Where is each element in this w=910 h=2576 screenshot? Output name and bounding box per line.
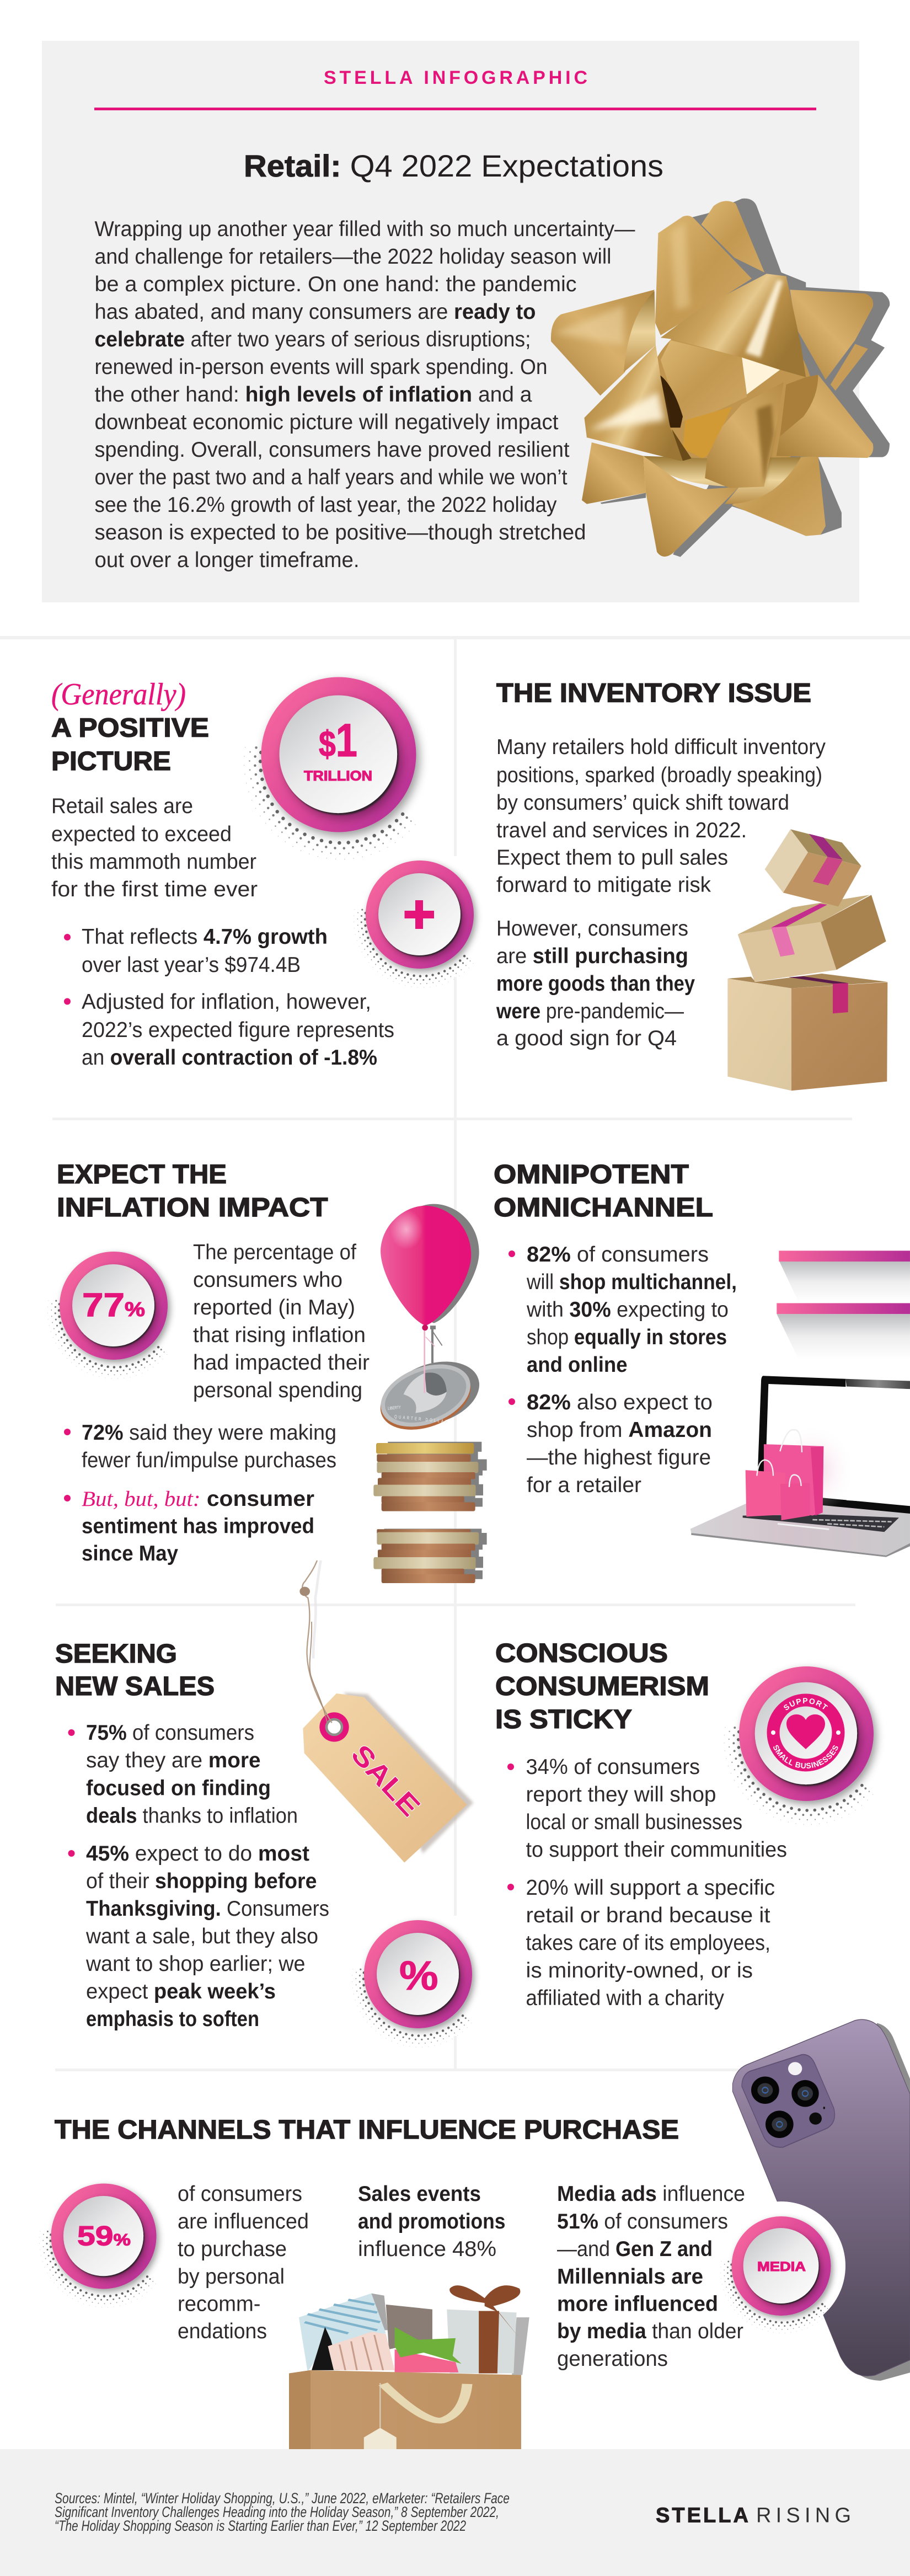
heading: THE CHANNELS THAT INFLUENCE PURCHASE: [55, 2115, 679, 2145]
heading: IS STICKY: [495, 1705, 632, 1734]
bullets: shop equally in stores: [527, 1326, 727, 1349]
bullets: fewer fun/impulse purchases: [82, 1449, 336, 1472]
intro paragraph: out over a longer timeframe.: [95, 548, 360, 572]
text block: Many retailers hold difficult inventory: [496, 735, 826, 759]
text block: However, consumers: [496, 917, 688, 940]
logo: Stella Rising: STELLA: [656, 2504, 748, 2527]
intro paragraph: has abated, and many consumers are ready to: [95, 300, 536, 324]
text block: Expect them to pull sales: [496, 846, 728, 869]
heading: [57, 1160, 328, 1222]
intro paragraph: spending. Overall, consumers have proved resilient: [95, 438, 570, 462]
column: media ads: more influenced: [557, 2292, 718, 2316]
heading: OMNICHANNEL: [494, 1193, 713, 1222]
bullets: [64, 925, 394, 1070]
heading: [495, 1639, 709, 1734]
sources: [55, 2490, 510, 2534]
bullets: 72% said they were making: [82, 1421, 336, 1445]
bullets: 34% of consumers: [526, 1755, 700, 1779]
badge: $1 trillion: TRILLION: [304, 768, 372, 784]
intro paragraph: season is expected to be positive—though stretched: [95, 521, 586, 544]
bullets: emphasis to soften: [86, 2007, 259, 2031]
text block: more goods than they: [496, 972, 695, 996]
column: media ads: 51% of consumers: [557, 2210, 728, 2233]
column: personal recommendations: by personal: [178, 2265, 285, 2289]
bullets: to support their communities: [526, 1838, 787, 1862]
image: sale price tag: SALE: [345, 1739, 426, 1822]
bullets: shop from Amazon: [527, 1418, 712, 1442]
logo: Stella Rising: RISING: [756, 2504, 851, 2527]
image: stacked boxes: [727, 829, 887, 1091]
logo: Stella Rising: [656, 2504, 851, 2527]
badge: support small businesses: SMALL BUSINESSES: [773, 1745, 838, 1768]
heading: OMNIPOTENT: [494, 1160, 689, 1189]
heading: A POSITIVE: [51, 714, 209, 742]
bullets: will shop multichannel,: [526, 1270, 737, 1294]
bullets: Thanksgiving. Consumers: [86, 1897, 329, 1921]
image: gold gift bow: [551, 199, 890, 557]
text block: Retail sales are: [51, 794, 193, 818]
bullets: Adjusted for inflation, however,: [82, 990, 371, 1014]
bullets: expect peak week’s: [86, 1980, 276, 2003]
intro paragraph: [95, 217, 635, 572]
text block: personal spending: [193, 1378, 362, 1402]
heading: (Generally): [51, 677, 186, 712]
column: personal recommendations: recomm-: [178, 2292, 260, 2316]
intro paragraph: downbeat economic picture will negatively impact: [95, 410, 559, 434]
image: laptop with shopping bags on shelves: [690, 1250, 910, 1557]
heading: [494, 1160, 713, 1222]
image: balloon lifting a coin: QUARTER DOLLAR: [394, 1414, 448, 1424]
text block: consumers who: [193, 1268, 342, 1292]
sources: Sources: Mintel, “Winter Holiday Shopping, U.S.,” June 2022, eMarketer: “Retailers Face: [55, 2490, 510, 2506]
text block: were pre-pandemic—: [496, 1000, 684, 1023]
column: sales events: Sales events: [358, 2182, 481, 2206]
panel: omnipotent omnichannel: [494, 1160, 910, 1557]
bullets: want to shop earlier; we: [85, 1952, 306, 1976]
panel: the inventory issue: [496, 678, 887, 1091]
heading: EXPECT THE: [57, 1160, 227, 1189]
bullets: deals thanks to inflation: [86, 1804, 298, 1828]
bullets: focused on finding: [86, 1776, 271, 1800]
bullets: sentiment has improved: [82, 1515, 314, 1538]
intro paragraph: Wrapping up another year filled with so much uncertainty—: [95, 217, 635, 241]
bullets: 82% of consumers: [527, 1243, 709, 1266]
image: sale price tag: [299, 1560, 473, 1863]
heading: SEEKING: [55, 1639, 177, 1669]
column: media ads: generations: [557, 2347, 668, 2371]
bullets: retail or brand because it: [526, 1904, 770, 1927]
text block: that rising inflation: [193, 1323, 366, 1347]
bullets: and online: [527, 1353, 628, 1377]
bullets: [68, 1721, 329, 2031]
panel: seeking new sales: [55, 1560, 473, 2047]
text block: positions, sparked (broadly speaking): [496, 763, 822, 787]
panel: expect the inflation impact: [47, 1160, 487, 1583]
bullets: 75% of consumers: [86, 1721, 254, 1745]
text block: [193, 1241, 370, 1402]
panel: the channels that influence purchase: [39, 2115, 845, 2449]
badge: 59%: [39, 2183, 157, 2307]
bullets: That reflects 4.7% growth: [82, 925, 328, 949]
column: personal recommendations: are influenced: [178, 2210, 309, 2233]
heading: THE INVENTORY ISSUE: [496, 678, 811, 708]
image: coin stacks: [373, 1442, 487, 1583]
column: personal recommendations: of consumers: [178, 2182, 302, 2206]
column: media ads: Media ads influence: [557, 2182, 745, 2206]
image: balloon lifting a coin: LIBERTY: [388, 1405, 401, 1411]
sources: “The Holiday Shopping Season is Starting Earlier than Ever,” 12 September 2022: [55, 2518, 466, 2534]
column: sales events: and promotions: [358, 2210, 505, 2233]
heading: CONSCIOUS: [495, 1639, 668, 1668]
badge: $1 trillion: $1: [319, 714, 357, 766]
bullets: [508, 1243, 737, 1497]
text block: had impacted their: [193, 1351, 370, 1375]
image: shopping bag full of gifts: [289, 2285, 529, 2449]
image: balloon lifting a coin: [376, 1204, 483, 1440]
text block: expected to exceed: [51, 822, 232, 846]
section dividers: [0, 636, 910, 2071]
text block: forward to mitigate risk: [496, 873, 711, 897]
intro paragraph: renewed in-person events will spark spending. On: [95, 355, 547, 379]
heading: PICTURE: [51, 747, 171, 776]
bullets: 20% will support a specific: [526, 1876, 775, 1900]
eyebrow: Stella Infographic: STELLA INFOGRAPHIC: [324, 67, 587, 88]
badge: support small businesses: [724, 1665, 881, 1825]
intro paragraph: be a complex picture. On one hand: the pandemic: [95, 272, 577, 296]
bullets: But, but, but: consumer: [82, 1487, 314, 1511]
panel: a positive picture: [51, 677, 474, 1070]
text block: travel and services in 2022.: [496, 819, 747, 842]
heading: CONSUMERISM: [495, 1672, 709, 1701]
badge: $1 trillion: [244, 677, 416, 859]
column: media ads: [557, 2182, 745, 2371]
bullets: an overall contraction of -1.8%: [82, 1046, 377, 1070]
intro paragraph: see the 16.2% growth of last year, the 2022 holiday: [95, 493, 557, 517]
text block: reported (in May): [193, 1296, 355, 1319]
bullets: want a sale, but they also: [85, 1925, 318, 1948]
title: Retail: Q4 2022 Expectations: [244, 148, 663, 183]
text block: for the first time ever: [51, 878, 258, 901]
heading: [55, 1639, 215, 1701]
intro paragraph: celebrate after two years of serious disruptions;: [95, 328, 531, 351]
badge: percent: %: [399, 1953, 438, 1998]
heading: NEW SALES: [55, 1672, 215, 1701]
text block: this mammoth number: [51, 850, 256, 874]
footer band: [0, 2449, 910, 2576]
badge: support small businesses: SUPPORT: [784, 1698, 828, 1710]
badge: plus: [354, 861, 474, 987]
bullets: since May: [82, 1542, 178, 1565]
bullets: for a retailer: [527, 1473, 641, 1497]
intro paragraph: and challenge for retailers—the 2022 holiday season will: [95, 245, 611, 269]
bullets: [64, 1421, 336, 1565]
column: personal recommendations: endations: [178, 2320, 267, 2343]
column: sales events: [358, 2182, 505, 2261]
heading: [51, 677, 209, 776]
bullets: 2022’s expected figure represents: [82, 1018, 394, 1042]
badge: 77%: [47, 1252, 168, 1378]
column: media ads: Millennials are: [557, 2265, 703, 2289]
badge: media: MEDIA: [757, 2259, 806, 2274]
text block: a good sign for Q4: [496, 1027, 677, 1050]
panel: conscious consumerism: [495, 1639, 881, 2010]
bullets: [507, 1755, 787, 2010]
bullets: over last year’s $974.4B: [82, 953, 301, 977]
text block: are still purchasing: [496, 944, 688, 968]
column: media ads: by media than older: [557, 2320, 743, 2343]
badge: 77%: 77 %: [82, 1286, 145, 1323]
text block: [496, 735, 826, 1050]
bullets: is minority-owned, or is: [526, 1959, 753, 1982]
bullets: takes care of its employees,: [526, 1931, 770, 1955]
badge: percent: [352, 1920, 472, 2047]
text block: by consumers’ quick shift toward: [496, 791, 789, 815]
bullets: of their shopping before: [86, 1869, 317, 1893]
bullets: say they are more: [86, 1749, 260, 1772]
column: media ads: —and Gen Z and: [557, 2237, 713, 2261]
bullets: local or small businesses: [526, 1810, 742, 1834]
bullets: with 30% expecting to: [526, 1298, 729, 1322]
bullets: report they will shop: [526, 1783, 716, 1807]
column: personal recommendations: to purchase: [178, 2237, 287, 2261]
text block: [51, 794, 258, 901]
bullets: 45% expect to do most: [86, 1842, 309, 1866]
intro paragraph: over the past two and a half years and while we won’t: [95, 466, 568, 489]
heading: INFLATION IMPACT: [57, 1193, 328, 1222]
image: purple smartphone: [732, 2019, 910, 2381]
column: personal recommendations: [178, 2182, 309, 2343]
text block: The percentage of: [193, 1241, 356, 1264]
intro paragraph: the other hand: high levels of inflation and a: [95, 383, 532, 407]
bullets: affiliated with a charity: [526, 1986, 724, 2010]
badge: media: [716, 2201, 845, 2333]
badge: 59%: 59 %: [77, 2221, 131, 2252]
intro panel: [42, 41, 859, 602]
bullets: 82% also expect to: [527, 1391, 713, 1414]
column: sales events: influence 48%: [358, 2237, 496, 2261]
sources: Significant Inventory Challenges Heading into the Holiday Season,” 8 September 2022,: [55, 2504, 499, 2520]
bullets: —the highest figure: [527, 1446, 711, 1469]
